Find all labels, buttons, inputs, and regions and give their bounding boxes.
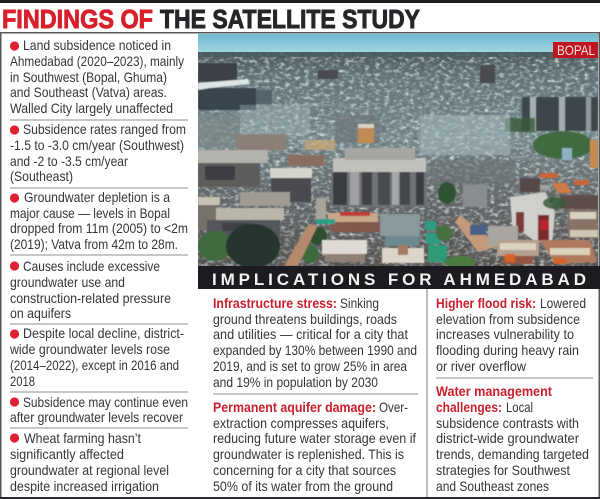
water management challenges: district-wide groundwater	[436, 430, 579, 446]
orange roofs, right	[540, 173, 558, 178]
higher flood risk	[436, 295, 586, 374]
finding 6: subsidence may continue	[10, 394, 188, 425]
tower block, upper right	[522, 97, 598, 131]
infrastructure stress	[213, 295, 417, 390]
finding 2: subsidence rates: Subsidence rates ranged from	[23, 121, 186, 137]
panel: implications, left column	[213, 295, 418, 494]
trees, lower left	[198, 231, 232, 261]
finding 3: groundwater depletion: dropped from 11m (2005) to <2m	[10, 220, 188, 236]
water management challenges: challenges:	[436, 399, 502, 415]
finding 2: subsidence rates: and -2 to -3.5 cm/year	[10, 153, 128, 169]
finding 2: subsidence rates: (Southeast)	[10, 168, 73, 184]
orange mid-rise	[358, 126, 374, 143]
infrastructure stress: expanded by 130% between 1990 and	[213, 342, 417, 358]
green roofs	[425, 221, 436, 230]
permanent aquifer damage	[213, 399, 416, 494]
water management challenges	[436, 383, 589, 494]
permanent aquifer damage: 50% of its water from the ground	[213, 478, 393, 494]
higher flood risk: Lowered	[540, 295, 586, 311]
higher flood risk: Higher flood risk:	[436, 295, 536, 311]
road	[284, 225, 318, 266]
banner: implications for Ahmedabad: IMPLICATIONS FOR AHMEDABAD	[212, 270, 586, 289]
permanent aquifer damage: extraction compresses aquifers,	[213, 415, 389, 431]
finding 5: district-wide levels	[9, 325, 184, 389]
infrastructure stress: and 19% in population by 2030	[213, 374, 378, 390]
water management challenges: and Southeast zones	[436, 478, 549, 494]
water management challenges: strategies for Southwest	[436, 462, 570, 478]
finding 1: land subsidence: in Southwest (Bopal, Ghuma)	[10, 69, 167, 85]
finding 7: wheat farming: groundwater at regional level	[10, 462, 169, 478]
finding 7: wheat farming: Wheat farming hasn’t	[24, 430, 141, 446]
higher flood risk: or river overflow	[436, 358, 527, 374]
permanent aquifer damage: concerning for a city that sources	[213, 462, 396, 478]
higher flood risk: flooding during heavy rain	[436, 342, 579, 358]
finding 6: subsidence may continue: after groundwater levels recover	[10, 409, 183, 425]
photo: aerial view of Bopal	[198, 34, 598, 268]
finding 2: subsidence rates: -1.5 to -3.0 cm/year (Southwest)	[10, 137, 184, 153]
finding 4: causes: Causes include excessive	[23, 258, 160, 274]
infrastructure stress: ground threatens buildings, roads	[213, 311, 397, 327]
trees, centre	[438, 182, 456, 204]
panel: implications, right column	[436, 295, 593, 494]
finding 7: wheat farming: significantly affected	[10, 446, 124, 462]
distant buildings, upper left	[198, 63, 237, 82]
finding 5: district-wide levels: wide groundwater levels rose	[9, 341, 170, 357]
mid-ground pale housing	[240, 105, 310, 135]
finding 1: land subsidence: Ahmedabad (2020–2023), mainly	[10, 53, 184, 69]
finding 3: groundwater depletion: (2019); Vatva from 42m to 28m.	[10, 236, 178, 252]
finding 5: district-wide levels: 2018	[10, 373, 35, 389]
permanent aquifer damage: groundwater is replenished. This is	[213, 446, 404, 462]
finding 7: wheat farming: despite increased irrigation	[10, 478, 159, 494]
top black rule	[0, 0, 600, 3]
finding 1: land subsidence: Land subsidence noticed in	[23, 37, 171, 53]
finding 3: groundwater depletion	[10, 189, 188, 252]
permanent aquifer damage: Permanent aquifer damage:	[213, 399, 376, 415]
title: THE SATELLITE STUDY	[160, 4, 420, 34]
finding 1: land subsidence: Walled City largely unaffected	[10, 100, 173, 116]
higher flood risk: increases vulnerability to	[436, 326, 574, 342]
water management challenges: Local	[506, 399, 533, 415]
buildings, left mid-ground	[198, 150, 268, 163]
finding 6: subsidence may continue: Subsidence may continue even	[23, 394, 188, 410]
finding 5: district-wide levels: (2014–2022), except in 2016 and	[10, 357, 179, 373]
water management challenges: Water management	[436, 383, 552, 399]
buildings, lower left	[198, 197, 220, 205]
infrastructure stress: and utilities — critical for a city that	[213, 326, 408, 342]
finding 7: wheat farming	[10, 430, 169, 494]
panel: findings list	[9, 37, 188, 494]
finding 4: causes: on aquifers	[10, 305, 71, 321]
finding 1: land subsidence	[10, 37, 184, 116]
finding 3: groundwater depletion: major cause — levels in Bopal	[10, 205, 170, 221]
finding 3: groundwater depletion: Groundwater depletion is a	[24, 189, 170, 205]
water management challenges: subsidence contrasts with	[436, 415, 579, 431]
finding 2: subsidence rates	[10, 121, 186, 184]
finding 4: causes: construction-related pressure	[10, 290, 171, 306]
permanent aquifer damage: reducing future water storage even if	[213, 430, 416, 446]
column divider	[426, 289, 428, 497]
low houses, foreground centre	[328, 213, 378, 225]
central apartment block	[331, 170, 427, 207]
permanent aquifer damage: Over-	[379, 399, 408, 415]
infrastructure stress: Sinking	[340, 295, 379, 311]
finding 4: causes: groundwater use and	[10, 274, 125, 290]
frame rule under title	[0, 32, 600, 34]
title	[2, 4, 420, 34]
finding 4: causes	[10, 258, 171, 321]
title: FINDINGS OF	[2, 4, 153, 34]
higher flood risk: elevation from subsidence	[436, 311, 580, 327]
lower-right buildings	[455, 215, 500, 252]
infrastructure stress: 2019, and is set to grow 25% in area	[213, 358, 407, 374]
finding 5: district-wide levels: Despite local decline, district-	[23, 325, 184, 341]
trees, right	[505, 118, 535, 132]
infrastructure stress: Infrastructure stress:	[213, 295, 337, 311]
finding 1: land subsidence: and Southeast (Vatva) areas.	[10, 84, 167, 100]
